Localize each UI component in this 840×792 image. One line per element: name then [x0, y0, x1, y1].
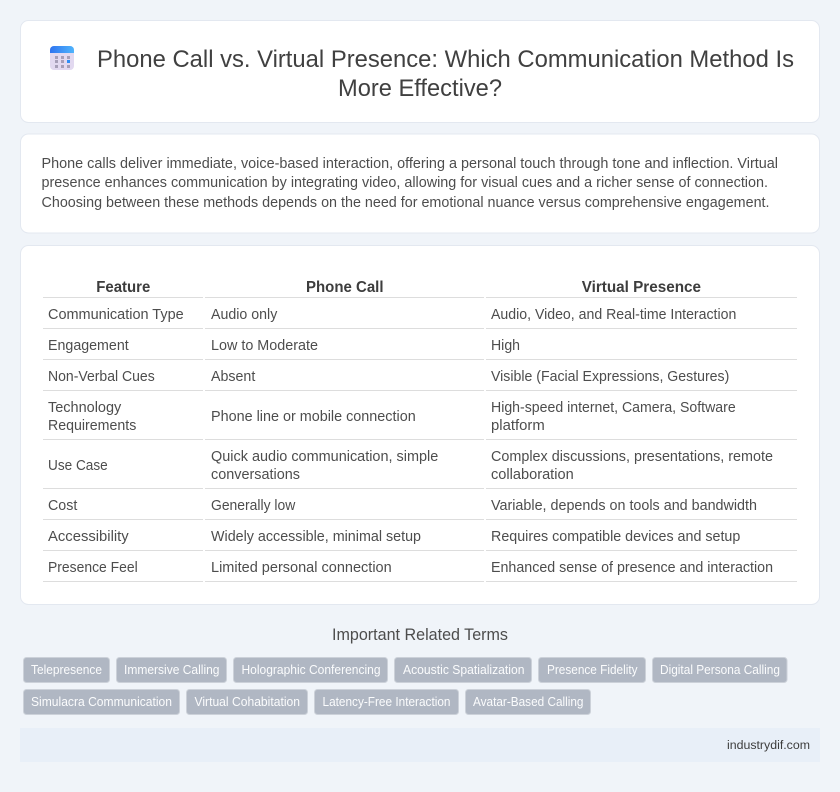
row: engagement: [43, 338, 797, 360]
row: accessibility: [43, 529, 797, 551]
tag: avatar-based calling: [466, 690, 590, 714]
row: accessibility: Accessibility: [48, 529, 129, 545]
row: non-verbal cues: Absent: [211, 369, 255, 385]
tag: holographic conferencing: [234, 658, 388, 682]
row: presence feel: Limited personal connection: [211, 560, 392, 576]
tag: immersive calling: [116, 658, 226, 682]
tag: telepresence: Telepresence: [31, 663, 102, 677]
row: engagement: Engagement: [48, 338, 129, 354]
intro text: presence enhances communication by integrating video, allowing for visual cues and a richer sense of connection.: [42, 175, 768, 191]
row: cost: Variable, depends on tools and bandwidth: [491, 498, 757, 514]
row: communication type: Communication Type: [48, 307, 184, 323]
row: accessibility: Widely accessible, minimal setup: [211, 529, 421, 545]
row: technology requirements: platform: [491, 418, 545, 434]
row: cost: [43, 498, 797, 520]
panel: header: [20, 20, 820, 122]
tag: telepresence: [24, 658, 110, 682]
title: Phone Call vs. Virtual Presence: Which Communication Method Is: [97, 46, 794, 73]
tag: virtual cohabitation: [186, 690, 308, 714]
tag: simulacra communication: [24, 690, 180, 714]
row: cost: Generally low: [211, 498, 296, 514]
row: communication type: Audio, Video, and Real-time Interaction: [491, 307, 736, 323]
row: communication type: Audio only: [211, 307, 278, 323]
tag: immersive calling: Immersive Calling: [124, 663, 220, 677]
intro text: Choosing between these methods depends on the need for emotional nuance versus comprehensive engagement.: [42, 195, 770, 211]
row: non-verbal cues: Non-Verbal Cues: [48, 369, 155, 385]
tag: acoustic spatialization: Acoustic Spatialization: [403, 663, 525, 677]
tag: virtual cohabitation: Virtual Cohabitation: [194, 695, 300, 709]
row: presence feel: [43, 560, 797, 582]
row: technology requirements: High-speed internet, Camera, Software: [491, 400, 736, 416]
tag: digital persona calling: Digital Persona Calling: [660, 663, 780, 677]
related terms tags: [24, 658, 787, 714]
tag: latency-free interaction: [314, 690, 458, 714]
row: accessibility: Requires compatible devices and setup: [491, 529, 740, 545]
row: cost: Cost: [48, 498, 77, 514]
tag: holographic conferencing: Holographic Conferencing: [242, 663, 381, 677]
title: More Effective?: [338, 75, 502, 102]
heading: important related terms: Important Related Terms: [332, 626, 508, 644]
tag: presence fidelity: [538, 658, 646, 682]
row: non-verbal cues: Visible (Facial Expressions, Gestures): [491, 369, 729, 385]
tag: latency-free interaction: Latency-Free Interaction: [322, 695, 451, 709]
table header: Feature: [96, 279, 150, 296]
title: [97, 46, 794, 102]
row: use case: [43, 449, 797, 489]
table header: Phone Call: [306, 279, 384, 296]
row: use case: conversations: [211, 467, 300, 483]
tag: digital persona calling: [652, 658, 787, 682]
tag: acoustic spatialization: [394, 658, 532, 682]
tag: simulacra communication: Simulacra Communication: [31, 695, 172, 709]
row: use case: Quick audio communication, simple: [211, 449, 438, 465]
footer source: industrydif.com: [727, 738, 810, 752]
row: technology requirements: [43, 400, 797, 440]
row: communication type: [43, 307, 797, 329]
tag: presence fidelity: Presence Fidelity: [547, 663, 638, 677]
footer bar: [20, 728, 820, 762]
intro text: Phone calls deliver immediate, voice-based interaction, offering a personal touch through tone and inflection. Virtual: [42, 156, 778, 172]
row: presence feel: Enhanced sense of presence and interaction: [491, 560, 773, 576]
row: use case: collaboration: [491, 467, 574, 483]
row: technology requirements: Requirements: [48, 418, 136, 434]
table header: Virtual Presence: [582, 279, 701, 296]
row: technology requirements: Phone line or mobile connection: [211, 409, 416, 425]
icon: calendar: [50, 46, 74, 70]
row: presence feel: Presence Feel: [48, 560, 138, 576]
row: use case: Complex discussions, presentations, remote: [491, 449, 773, 465]
row: technology requirements: Technology: [48, 400, 122, 416]
row: use case: Use Case: [48, 458, 108, 474]
row: non-verbal cues: [43, 369, 797, 391]
table header: [43, 279, 797, 298]
row: engagement: High: [491, 338, 520, 354]
intro text: [42, 156, 778, 211]
tag: avatar-based calling: Avatar-Based Calling: [473, 695, 584, 709]
row: engagement: Low to Moderate: [211, 338, 318, 354]
panel: comparison table: [20, 246, 820, 604]
panel: introduction: [20, 134, 820, 233]
